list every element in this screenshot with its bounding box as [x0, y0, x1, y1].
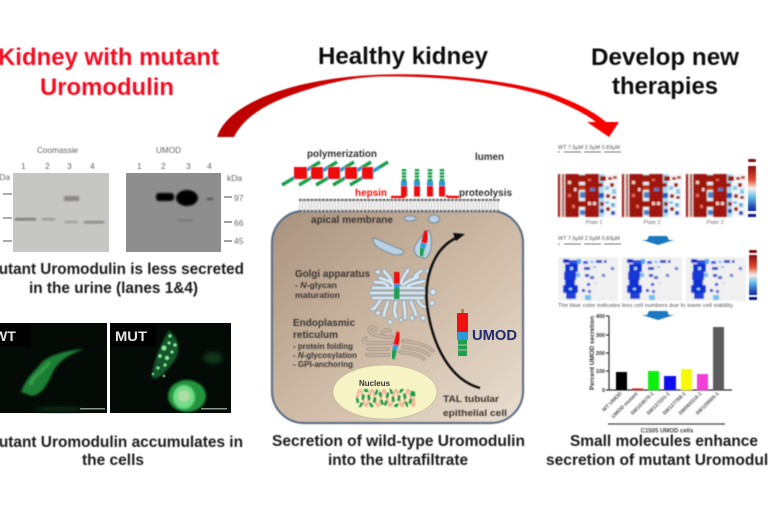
- umod blot: [126, 173, 232, 252]
- y tick labels: 400: [596, 314, 605, 320]
- arrow: red arc: [217, 74, 619, 137]
- caption: less secreted: [0, 261, 244, 297]
- nucleus: [333, 365, 437, 419]
- diagram labels: [293, 149, 513, 419]
- title: develop new therapies: Develop new: [591, 44, 739, 71]
- blot labels: 1: [137, 161, 142, 171]
- vesicles: [373, 215, 440, 258]
- arrow: blue down 2: [642, 311, 674, 320]
- heatmap plates: [558, 257, 746, 301]
- panel: western blots: [0, 145, 244, 252]
- viability note: The blue color indicates less cell numbers due to lower cell viability.: [558, 303, 734, 309]
- y tick labels: 0: [602, 388, 605, 394]
- caption: small molecules: [546, 433, 768, 469]
- diagram labels: - GPI-anchoring: [293, 360, 353, 369]
- blot labels: [0, 145, 244, 246]
- panel: mutant fluorescence image: [110, 323, 231, 413]
- panel: cell secretion diagram: [272, 149, 523, 423]
- x axis labels: UMOD mutant: [611, 391, 640, 420]
- x axis labels: WT UMOD: [601, 391, 624, 413]
- panel: blue heatmap screen: [558, 236, 757, 309]
- diagram labels: Golgi apparatus: [295, 269, 371, 280]
- vesicle cargo: [420, 231, 427, 256]
- diagram labels: proteolysis: [459, 188, 513, 199]
- blot labels: kDa: [227, 173, 242, 183]
- axes: [606, 316, 732, 390]
- y tick labels: 300: [596, 333, 605, 339]
- endoplasmic reticulum: [364, 327, 433, 359]
- blot labels: UMOD: [156, 145, 181, 155]
- x axis labels: SW104570-1: [630, 391, 655, 417]
- panel: wild-type fluorescence image: [0, 323, 107, 413]
- title: kidney with mutant uromodulin: Kidney with mutant: [0, 44, 219, 71]
- diagram labels: - protein folding: [293, 342, 353, 351]
- diagram labels: reticulum: [293, 330, 338, 341]
- caption: accumulates: the cells: [82, 452, 144, 469]
- anchored uromodulin stalks: [391, 169, 459, 197]
- y tick labels: 100: [596, 369, 605, 375]
- heatmap plates: [558, 174, 746, 217]
- label: MUT: MUT: [115, 328, 147, 344]
- title: kidney with mutant uromodulin: [0, 44, 219, 101]
- blot labels: 97: [234, 193, 244, 203]
- transport arrow: [427, 233, 480, 388]
- blot labels: 4: [90, 161, 95, 171]
- diagram labels: - N-glycosylation: [293, 351, 357, 360]
- diagram labels: polymerization: [307, 149, 377, 160]
- x axis labels: SW126565-1: [695, 391, 720, 417]
- diagram labels: - N-glycan: [295, 280, 337, 290]
- title: kidney with mutant uromodulin: Uromodulin: [40, 74, 174, 101]
- blot labels: 3: [186, 161, 191, 171]
- bar chart: [590, 314, 732, 434]
- x axis labels: [601, 391, 720, 420]
- panel: red heatmap screen: [558, 145, 756, 226]
- uromodulin schematic and label: [457, 309, 517, 356]
- diagram labels: apical membrane: [311, 215, 394, 226]
- blot labels: 66: [234, 218, 244, 228]
- group bracket: [608, 423, 725, 425]
- colour bar: [749, 250, 757, 300]
- arrow: blue down 1: [642, 236, 674, 245]
- diagram labels: Endoplasmic: [293, 318, 356, 329]
- caption: accumulates: [0, 434, 243, 469]
- label: nucleus: Nucleus: [359, 379, 391, 388]
- bars: [616, 327, 724, 390]
- dose labels: WT 7.5µM 2.5µM 0.83µM: [558, 145, 620, 151]
- diagram labels: epithelial cell: [443, 408, 507, 419]
- cell body: [272, 211, 523, 423]
- title: develop new therapies: [591, 44, 739, 100]
- diagram labels: hepsin: [355, 188, 387, 199]
- plate labels: Plate 2: [643, 220, 661, 226]
- blot labels: 2: [45, 161, 50, 171]
- caption: secretion: [272, 433, 525, 469]
- blot labels: 1: [21, 161, 26, 171]
- coomassie blot: [3, 173, 109, 252]
- bar chart: C1505 UMOD cells: [641, 428, 694, 434]
- x axis labels: SW065316-1: [678, 391, 703, 417]
- polymerization filament: [282, 162, 388, 185]
- caption: less secreted: in the urine (lanes 1&4): [29, 280, 198, 297]
- golgi cargo: [394, 272, 400, 299]
- y axis label: Percent UMOD secretion: [590, 316, 596, 390]
- title: healthy kidney: Healthy kidney: [318, 43, 489, 70]
- uromodulin schematic and label: UMOD: [472, 328, 517, 344]
- caption: secretion: into the ultrafiltrate: [328, 452, 468, 469]
- plate labels: Plate 3: [706, 220, 724, 226]
- blot labels: 45: [234, 236, 244, 246]
- diagram labels: lumen: [475, 152, 504, 163]
- blot labels: 3: [67, 161, 72, 171]
- caption: small molecules: Small molecules enhance: [570, 433, 758, 450]
- y tick labels: 200: [596, 351, 605, 357]
- plate labels: Plate 1: [585, 220, 603, 226]
- dose labels: WT 7.5µM 2.5µM 0.83µM: [558, 236, 620, 242]
- y tick labels: [596, 314, 605, 394]
- blot labels: 4: [207, 161, 212, 171]
- diagram labels: TAL tubular: [443, 394, 499, 405]
- colour bar: [748, 159, 756, 217]
- x axis labels: SW127788-1: [662, 391, 687, 417]
- title: develop new therapies: therapies: [612, 73, 718, 100]
- golgi apparatus: [371, 269, 436, 324]
- er cargo: [392, 332, 399, 359]
- blot labels: 2: [161, 161, 166, 171]
- caption: secretion: Secretion of wild-type Uromodulin: [272, 433, 525, 450]
- diagram labels: maturation: [295, 290, 340, 300]
- apical membrane: [299, 199, 500, 212]
- blot labels: Coomassie: [37, 145, 78, 155]
- x axis labels: SW137231-1: [646, 391, 671, 417]
- plate labels: [585, 220, 724, 226]
